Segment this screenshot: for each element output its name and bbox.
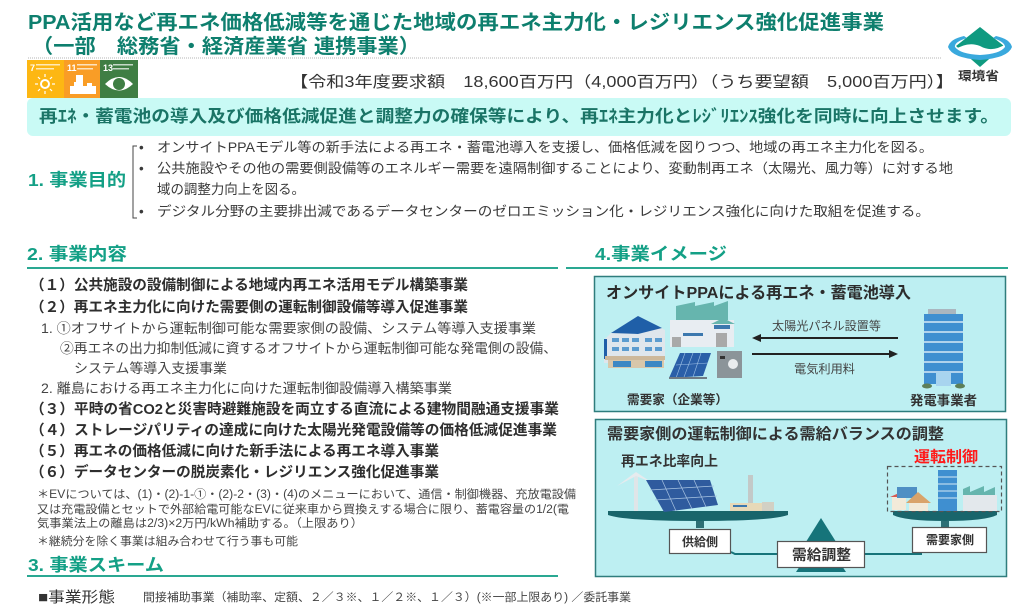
title: PPA活用など再エネ価格低減等を通じた地域の再エネ主力化・レジリエンス強化促進事業 [28,10,884,34]
section 2 list: （３）平時の省CO2と災害時避難施設を両立する直流による建物間融通支援事業 [30,400,559,418]
icon: Ministry of the Environment logo [948,27,1012,83]
section 1 bullets: • [139,140,144,155]
icon: solar panel [669,353,711,379]
section 2 heading: 2. 事業内容 [27,244,128,264]
SDG icons: 13 [103,63,113,73]
title [28,10,884,58]
panel: on-site PPA [594,276,1006,412]
section 2 list: システム等導入支援事業 [74,360,228,376]
SDG icons [27,60,138,98]
icon: demand-side buildings on scale [888,466,1002,527]
section 2 list: ②再エネの出力抑制低減に資するオフサイトから運転制御可能な発電側の設備、 [60,340,557,356]
section 1 bullets: • [139,204,144,219]
icon: factory [670,301,735,347]
section 1 bullets: 公共施設やその他の需要側設備等のエネルギー需要を遠隔制御することにより、変動制再エネ（太陽光、風力等）に対する地 [157,160,954,176]
section 1 heading: 1. 事業目的 [28,170,126,190]
notes [37,487,577,548]
section 2 list [30,276,559,481]
icon: storage battery [717,351,742,378]
summary band [27,98,1011,136]
section 1 bullets: • [139,161,144,176]
notes: 気事業法上の離島は2/3)×2万円/kWh補助する。（上限あり） [37,516,363,530]
section 2 list: 2. 離島における再エネ主力化に向けた運転制御設備導入構築事業 [41,381,453,396]
box: supply-demand adjustment [778,542,864,568]
panel: demand-side control: 需要家側の運転制御による需給バランスの調整 [607,425,945,443]
icon: balance fulcrum [731,518,922,572]
section 2 list: （４）ストレージパリティの達成に向けた太陽光発電設備等の価格低減促進事業 [30,421,558,439]
box: supply side: 供給側 [682,534,718,549]
scheme type: 間接補助事業（補助率、定額、２／３※、１／２※、１／３）(※一部上限あり) ／委託事業 [143,590,632,604]
label: power producer: 発電事業者 [910,393,977,408]
section 2 list: （２）再エネ主力化に向けた需要側の運転制御設備等導入促進事業 [30,298,469,316]
section 2 list: （１）公共施設の設備制御による地域内再エネ活用モデル構築事業 [30,276,469,294]
box: demand side: 需要家側 [926,532,974,547]
icon: office tower [922,309,965,388]
notes: 又は充電設備とセットで外部給電可能なEVに従来車から買換えする場合に限り、蓄電容量の1/2(電 [37,502,570,516]
section 3 heading: 3. 事業スキーム [28,555,164,575]
section 4 heading: 4.事業イメージ [595,244,727,264]
section 2 list: （６）データセンターの脱炭素化・レジリエンス強化促進事業 [30,463,439,481]
budget line: 【令和3年度要求額 18,600百万円（4,000百万円）（うち要望額 5,000百万円）】 [290,73,954,91]
section 1 bullets: 域の調整力向上を図る。 [157,182,305,197]
notes: ＊継続分を除く事業は組み合わせて行う事も可能 [37,534,299,548]
panel: demand-side control [596,420,1006,576]
panel: demand-side control: 運転制御 [914,448,978,466]
SDG icons: 11 [67,63,77,73]
arrow: electricity fee [752,350,898,358]
box: supply side [670,530,730,554]
label: demand side: 需要家（企業等） [627,392,728,407]
section 2 list: 1. ①オフサイトから運転制御可能な需要家側の設備、システム等導入支援事業 [41,320,537,336]
icon: supply-side generation on scale [608,472,788,528]
SDG icons: 7 [30,63,35,73]
section 1 bullets [139,139,954,219]
panel: demand-side control: 再エネ比率向上 [621,453,718,469]
section 1 bullets: デジタル分野の主要排出減であるデータセンターのゼロエミッション化・レジリエンス強化に向けた取組を促進する。 [157,203,930,219]
box: demand side [912,528,986,552]
icon: department store [604,316,665,368]
scheme type [38,589,632,605]
panel: on-site PPA: オンサイトPPAによる再エネ・蓄電池導入 [606,283,911,302]
section 1 bullets: オンサイトPPAモデル等の新手法による再エネ・蓄電池導入を支援し、価格低減を図りつつ、地域の再エネ主力化を図る。 [157,139,933,155]
icon: Ministry of the Environment logo: 環境省 [958,68,999,83]
arrow: panel installation [752,334,898,342]
notes: ＊EVについては、(1)・(2)-1-①・(2)-2・(3)・(4)のメニューにおいて、通信・制御機器、充放電設備 [37,487,577,501]
label: electricity fee: 電気利用料 [794,361,855,376]
label: solar panel installation: 太陽光パネル設置等 [772,318,881,333]
box: supply-demand adjustment: 需給調整 [792,547,852,564]
summary band: 再ｴﾈ・蓄電池の導入及び価格低減促進と調整力の確保等により、再ｴﾈ主力化とﾚｼﾞﾘｴﾝｽ強化を同時に向上させます。 [39,106,999,126]
section 2 list: （５）再エネの価格低減に向けた新手法による再エネ導入事業 [30,442,440,460]
title: （一部 総務省・経済産業省 連携事業） [32,34,420,58]
